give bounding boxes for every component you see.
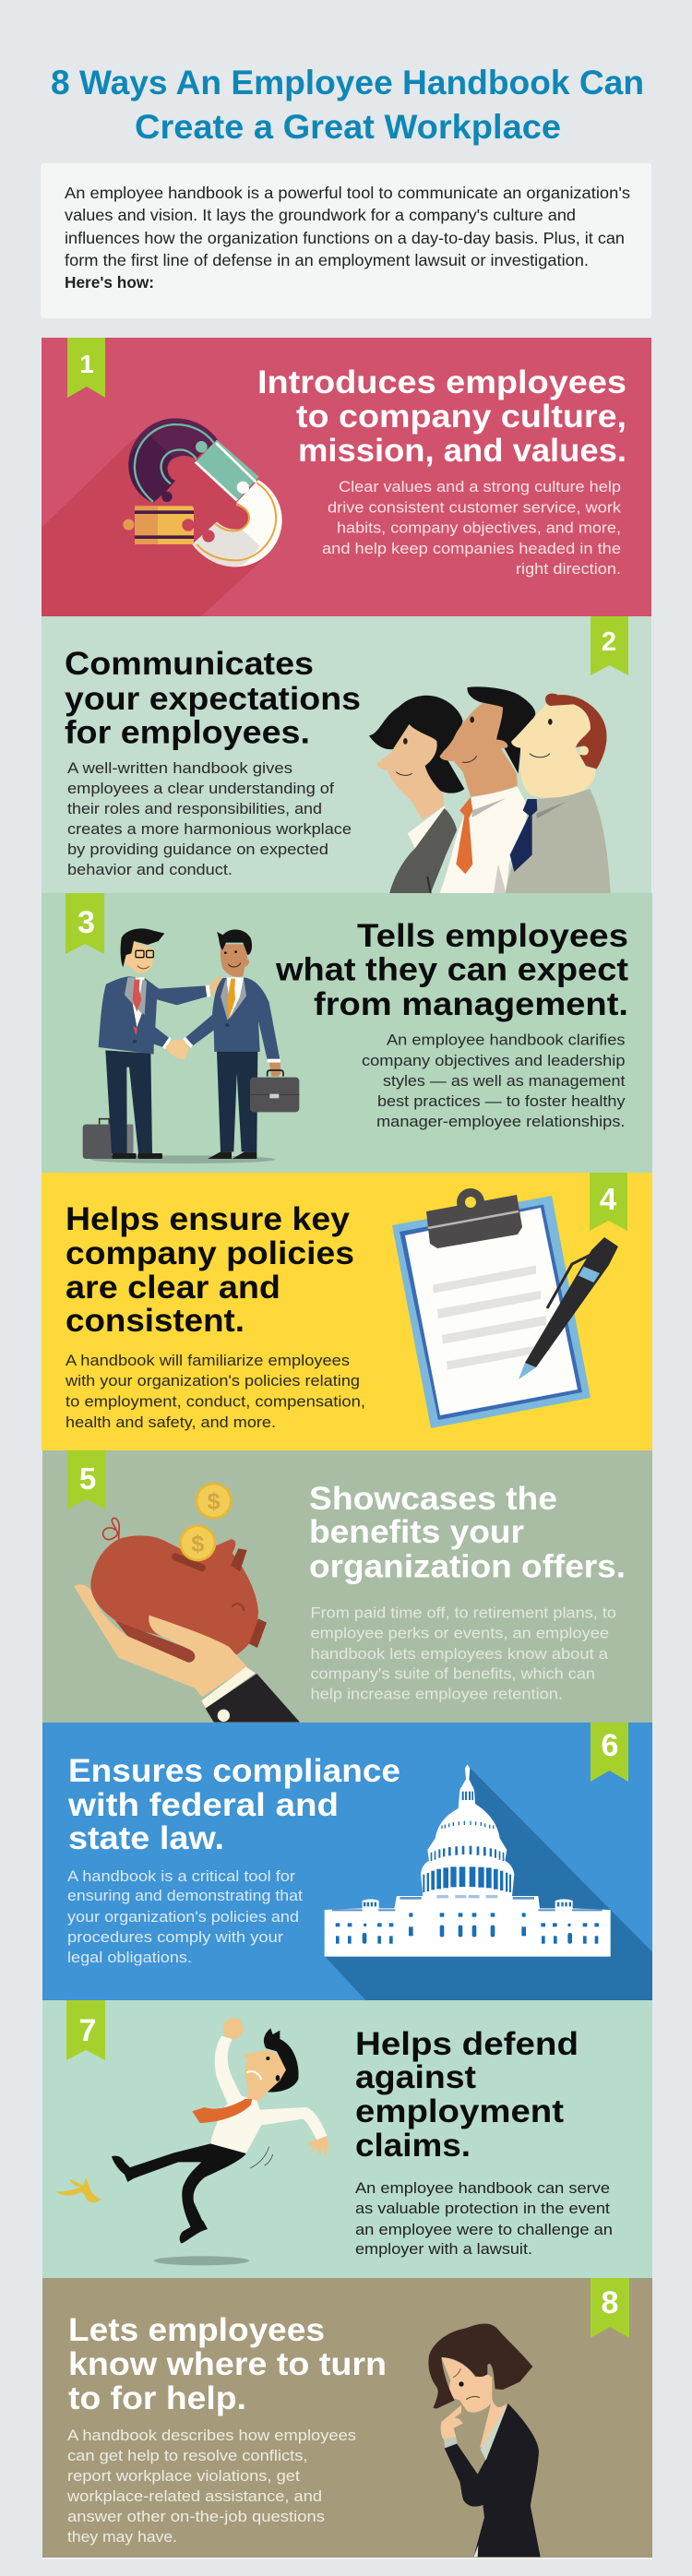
body text 3: styles — as well as management (383, 1072, 626, 1090)
body text 8: answer other on-the-job questions (67, 2508, 325, 2525)
panel: introduction (41, 163, 651, 318)
heading 7: Helps defend (355, 2026, 579, 2062)
intro text: An employee handbook is a powerful tool to communicate an organization's (65, 184, 630, 202)
title: 8 Ways An Employee Handbook Can (51, 64, 644, 101)
body text 5 (310, 1604, 616, 1703)
body text 8: report workplace violations, get (67, 2467, 300, 2485)
heading 1: Introduces employees (257, 364, 626, 400)
badge 3: 3 (78, 905, 95, 940)
heading 3: Tells employees (357, 918, 628, 954)
body text 4: with your organization's policies relating (65, 1372, 360, 1389)
title (51, 64, 644, 146)
body text 5: company's suite of benefits, which can (310, 1664, 595, 1683)
icon: piggy bank in hand: $ (208, 1489, 221, 1515)
heading 5: organization offers. (309, 1548, 626, 1585)
badge 5 (67, 1450, 105, 1509)
badge 6 (591, 1723, 628, 1782)
panel: step 3 management (42, 893, 652, 1173)
body text 3: manager-employee relationships. (376, 1113, 626, 1130)
heading 4: are clear and (66, 1270, 280, 1306)
icon: clipboard and pen (392, 1188, 618, 1428)
panel: step 5 benefits (42, 1450, 652, 1723)
body text 5: help increase employee retention. (310, 1685, 563, 1703)
heading 4: Helps ensure key (66, 1201, 351, 1237)
body text 7: employer with a lawsuit. (355, 2240, 532, 2258)
heading 1: to company culture, (296, 399, 626, 435)
heading 6: with federal and (67, 1787, 339, 1823)
body text 7: as valuable protection in the event (355, 2200, 610, 2217)
badge 4 (590, 1173, 627, 1231)
body text 2: by providing guidance on expected (67, 841, 328, 858)
body text 8: A handbook describes how employees (67, 2427, 356, 2444)
heading 8: to for help. (68, 2380, 246, 2416)
badge 2: 2 (602, 627, 616, 657)
intro text: Here's how: (65, 273, 154, 292)
heading 5 (309, 1481, 626, 1585)
body text 8 (66, 2427, 356, 2546)
heading 3: from management. (314, 986, 628, 1022)
badge 6: 6 (602, 1728, 618, 1763)
badge 7 (66, 2000, 105, 2060)
heading 5: Showcases the (309, 1481, 557, 1517)
body text 2 (67, 759, 352, 878)
body text 8: they may have. (67, 2528, 177, 2546)
heading 7: employment (355, 2093, 564, 2129)
body text 1: Clear values and a strong culture help (339, 478, 621, 495)
body text 5: From paid time off, to retirement plans, to (310, 1604, 616, 1622)
body text 4: to employment, conduct, compensation, (66, 1393, 365, 1410)
body text 7: an employee were to challenge an (355, 2221, 613, 2238)
heading 8: Lets employees (68, 2312, 325, 2348)
icon: piggy bank in hand: $ (191, 1531, 204, 1556)
icon: piggy bank in hand (74, 1483, 300, 1723)
panel: step 2 expectations (42, 616, 651, 893)
heading 1 (257, 364, 626, 469)
badge 5: 5 (79, 1461, 96, 1496)
body text 6: your organization's policies and (67, 1908, 299, 1926)
badge 2 (591, 616, 628, 675)
body text 2: creates a more harmonious workplace (67, 820, 352, 838)
body text 6: procedures comply with your (67, 1928, 283, 1946)
heading 4: consistent. (66, 1303, 245, 1339)
heading 2: for employees. (65, 714, 310, 751)
heading 6: Ensures compliance (68, 1753, 400, 1789)
intro text: influences how the organization functions on a day-to-day basis. Plus, it can (65, 229, 625, 247)
badge 3 (66, 893, 104, 954)
title: Create a Great Workplace (135, 108, 561, 146)
icon: puzzle chain (123, 418, 282, 566)
icon: man slipping on banana peel (55, 2018, 328, 2265)
heading 8: know where to turn (68, 2346, 387, 2382)
badge 1: 1 (79, 350, 94, 378)
intro text: form the first line of defense in an employment lawsuit or investigation. (65, 251, 589, 269)
heading 5: benefits your (309, 1514, 524, 1550)
heading 4: company policies (66, 1235, 354, 1271)
body text 3: best practices — to foster healthy (377, 1092, 626, 1110)
body text 7 (355, 2179, 613, 2258)
heading 4 (66, 1201, 354, 1339)
panel: step 6 compliance (42, 1723, 652, 2000)
body text 8: workplace-related assistance, and (66, 2487, 322, 2505)
panel: step 4 policies (42, 1173, 652, 1450)
body text 2: A well-written handbook gives (67, 759, 292, 777)
icon: capitol building (325, 1764, 652, 2000)
panel: step 1 culture (42, 338, 651, 616)
badge 7: 7 (79, 2013, 96, 2048)
body text 1: drive consistent customer service, work (328, 498, 622, 517)
body text 1 (322, 478, 622, 578)
body text 2: employees a clear understanding of (67, 780, 334, 797)
heading 6 (67, 1753, 400, 1856)
body text 1: habits, company objectives, and more, (337, 519, 621, 537)
heading 7 (355, 2026, 579, 2164)
icon: thoughtful woman (428, 2324, 541, 2557)
body text 4: health and safety, and more. (66, 1413, 276, 1431)
intro text: values and vision. It lays the groundwork for a company's culture and (65, 206, 576, 224)
body text 4 (65, 1352, 365, 1431)
icon: business handshake (83, 928, 299, 1163)
body text 5: employee perks or events, an employee (310, 1624, 609, 1642)
body text 3: company objectives and leadership (362, 1052, 626, 1069)
badge 1 (67, 338, 105, 398)
heading 2 (65, 646, 361, 751)
body text 6: ensuring and demonstrating that (67, 1887, 303, 1904)
panel: step 8 help (42, 2278, 652, 2559)
body text 8: can get help to resolve conflicts, (67, 2447, 308, 2464)
heading 1: mission, and values. (298, 433, 626, 469)
intro text (65, 184, 630, 292)
body text 2: behavior and conduct. (67, 861, 233, 878)
badge 8: 8 (602, 2285, 618, 2320)
body text 1: and help keep companies headed in the (322, 540, 621, 557)
heading 2: your expectations (65, 681, 361, 717)
body text 6 (67, 1867, 303, 1966)
heading 8 (68, 2312, 387, 2416)
heading 7: against (355, 2059, 476, 2095)
badge 8 (591, 2278, 629, 2338)
heading 3 (275, 918, 628, 1022)
body text 3: An employee handbook clarifies (387, 1032, 626, 1048)
body text 3 (362, 1032, 626, 1130)
body text 4: A handbook will familiarize employees (66, 1352, 350, 1369)
icon: three employees (369, 686, 611, 893)
body text 7: An employee handbook can serve (355, 2179, 610, 2197)
body text 5: handbook lets employees know about a (310, 1645, 609, 1663)
badge 4: 4 (600, 1182, 617, 1216)
body text 6: A handbook is a critical tool for (67, 1867, 295, 1885)
heading 2: Communicates (65, 646, 314, 682)
panel: step 7 claims (42, 2000, 652, 2278)
body text 1: right direction. (516, 560, 621, 578)
heading 7: claims. (355, 2128, 471, 2164)
heading 6: state law. (68, 1820, 224, 1856)
body text 2: their roles and responsibilities, and (67, 800, 322, 817)
heading 3: what they can expect (275, 952, 628, 987)
body text 6: legal obligations. (67, 1949, 192, 1966)
